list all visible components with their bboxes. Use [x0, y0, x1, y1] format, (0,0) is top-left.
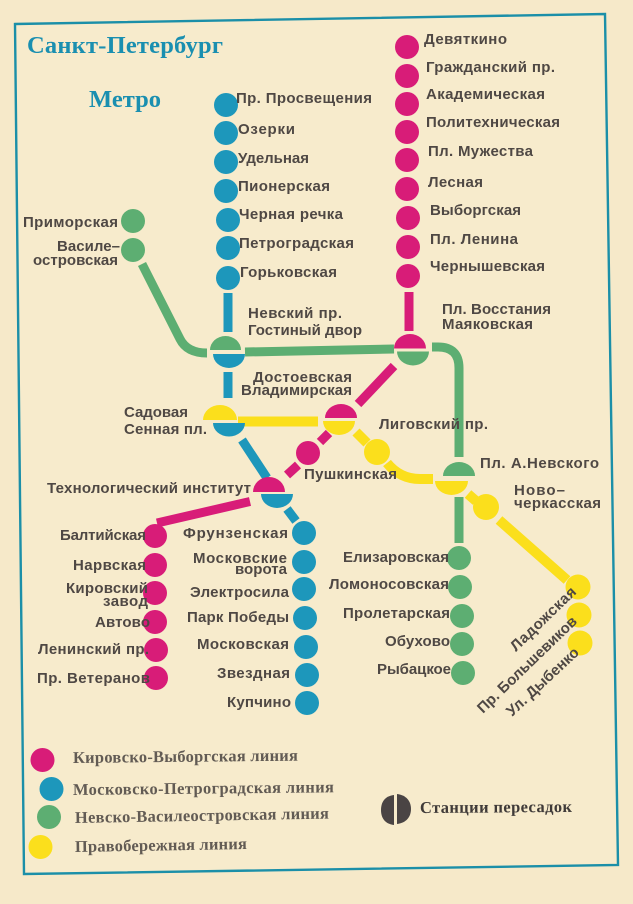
station labels: Kirov-Vyborg north: Пл. Мужества: [428, 143, 534, 160]
legend: Moscow-Petrograd line: Московско-Петроградская линия: [73, 777, 334, 799]
station labels: Pravoberezhnaya rotated: Ладожская: [507, 584, 580, 655]
line: Nevsko-Vasileostrovskaya (green): [142, 264, 459, 543]
legend: Pravoberezhnaya line: [28, 834, 247, 859]
station labels: Moscow-Petrograd south: ворота: [235, 561, 288, 578]
station labels: Moscow-Petrograd south: Купчино: [227, 694, 291, 711]
station labels: Kirov-Vyborg north: Академическая: [426, 86, 545, 103]
title: Санкт-Петербург: [27, 32, 223, 59]
station labels: Moscow-Petrograd north: Озерки: [238, 121, 295, 138]
station labels: Kirov-Vyborg south: Балтийская: [60, 527, 146, 544]
station labels: central interchanges: Садовая: [124, 404, 188, 421]
station labels: Moscow-Petrograd north: Удельная: [238, 150, 309, 167]
station labels: central interchanges: Сенная пл.: [124, 421, 207, 438]
stations: Kirov-Vyborg south: [143, 441, 320, 690]
station labels: central interchanges: Гостиный двор: [248, 322, 362, 339]
station labels: Kirov-Vyborg south: Автово: [95, 614, 150, 631]
station labels: Moscow-Petrograd north: Пр. Просвещения: [236, 90, 372, 107]
station labels: Kirov-Vyborg south: [37, 527, 150, 687]
station labels: Moscow-Petrograd south: Парк Победы: [187, 609, 289, 626]
stations: Kirov-Vyborg north: [395, 35, 420, 288]
station labels: Pravoberezhnaya rotated: Пр. Большевиков: [474, 613, 581, 717]
legend: Nevsko-Vasileostrovskaya line: Невско-Василеостровская линия: [75, 804, 329, 827]
station labels: Moscow-Petrograd south: Электросила: [190, 584, 290, 601]
station labels: central interchanges: Пл. Восстания: [442, 301, 551, 318]
station labels: central interchanges: Владимирская: [241, 382, 352, 399]
interchange: Technological Institute: [253, 477, 293, 508]
line: Pravoberezhnaya (yellow): [238, 422, 567, 580]
station labels: Moscow-Petrograd south: [183, 525, 291, 711]
legend: Pravoberezhnaya line: Правобережная линия: [75, 834, 247, 856]
subtitle: Метро: [89, 86, 161, 113]
station labels: Kirov-Vyborg north: [424, 31, 560, 275]
station labels: central interchanges: черкасская: [514, 495, 601, 512]
station labels: Moscow-Petrograd north: Горьковская: [240, 264, 337, 281]
station labels: central interchanges: Технологический институт: [47, 480, 251, 497]
legend: Kirov-Vyborg line: [30, 746, 298, 772]
station labels: Kirov-Vyborg north: Гражданский пр.: [426, 59, 555, 76]
station labels: Nevsko-Vasileostrovskaya south: Пролетарская: [343, 605, 450, 622]
interchange: Vosstaniya / Mayakovskaya: [394, 334, 429, 366]
station labels: Kirov-Vyborg north: Чернышевская: [430, 258, 545, 275]
station labels: Nevsko-Vasileostrovskaya south: Рыбацкое: [377, 661, 451, 678]
station labels: Kirov-Vyborg south: Нарвская: [73, 557, 146, 574]
station labels: central interchanges: Ново–: [514, 482, 565, 499]
station labels: Vasileostrovskaya branch: островская: [33, 252, 118, 269]
station labels: Vasileostrovskaya branch: Василе–: [57, 238, 120, 255]
station labels: Moscow-Petrograd north: Петроградская: [239, 235, 354, 252]
stations: Pravoberezhnaya: [364, 439, 592, 656]
station labels: Kirov-Vyborg south: Пр. Ветеранов: [37, 670, 150, 687]
station labels: Vasileostrovskaya branch: Приморская: [23, 214, 118, 231]
legend: Kirov-Vyborg line: Кировско-Выборгская линия: [73, 746, 298, 767]
station labels: Nevsko-Vasileostrovskaya south: Ломоносовская: [329, 576, 449, 593]
station labels: Moscow-Petrograd south: Московская: [197, 636, 289, 653]
interchange: Alexander Nevsky: [435, 462, 475, 495]
station labels: Kirov-Vyborg south: Кировский: [66, 580, 148, 597]
station labels: central interchanges: Пушкинская: [304, 466, 397, 483]
legend: interchange icon: [381, 794, 411, 825]
station labels: central interchanges: Маяковская: [442, 316, 533, 333]
station labels: central interchanges: [47, 301, 601, 512]
station labels: Kirov-Vyborg north: Лесная: [428, 174, 483, 191]
line: Kirov-Vyborg (pink): [157, 292, 409, 523]
station labels: Kirov-Vyborg south: Ленинский пр.: [38, 641, 149, 658]
station labels: Nevsko-Vasileostrovskaya south: [329, 549, 451, 678]
station labels: Vasileostrovskaya branch: [23, 214, 120, 269]
station labels: Kirov-Vyborg north: Выборгская: [430, 202, 521, 219]
station labels: Moscow-Petrograd north: [236, 90, 372, 281]
station labels: Kirov-Vyborg north: Политехническая: [426, 114, 560, 131]
interchange: Sadovaya / Sennaya: [203, 405, 245, 437]
station labels: central interchanges: Лиговский пр.: [379, 416, 488, 433]
legend: interchange label: Станции пересадок: [420, 797, 573, 817]
station labels: Moscow-Petrograd south: Фрунзенская: [183, 525, 288, 542]
station labels: Kirov-Vyborg south: завод: [103, 593, 148, 610]
station labels: Pravoberezhnaya rotated: Ул. Дыбенко: [503, 644, 583, 720]
station labels: Nevsko-Vasileostrovskaya south: Обухово: [385, 633, 450, 650]
interchange: Dostoevskaya / Vladimirskaya: [323, 404, 357, 435]
stations: Moscow-Petrograd north: [214, 93, 240, 290]
station labels: Kirov-Vyborg north: Пл. Ленина: [430, 231, 519, 248]
interchange: Nevsky / Gostiny Dvor: [210, 336, 245, 368]
station labels: Moscow-Petrograd north: Пионерская: [238, 178, 330, 195]
station labels: Moscow-Petrograd south: Звездная: [217, 665, 290, 682]
station labels: central interchanges: Достоевская: [253, 369, 352, 386]
station labels: central interchanges: Невский пр.: [248, 305, 342, 322]
line: Moscow-Petrograd (blue): [228, 293, 296, 521]
station labels: central interchanges: Пл. А.Невского: [480, 455, 599, 472]
station labels: Kirov-Vyborg north: Девяткино: [424, 31, 507, 48]
station labels: Moscow-Petrograd north: Черная речка: [239, 206, 344, 223]
station labels: Moscow-Petrograd south: Московские: [193, 550, 287, 567]
stations: Nevsko-Vasileostrovskaya: [121, 209, 475, 685]
stations: Moscow-Petrograd south: [292, 521, 319, 715]
station labels: Nevsko-Vasileostrovskaya south: Елизаровская: [343, 549, 449, 566]
